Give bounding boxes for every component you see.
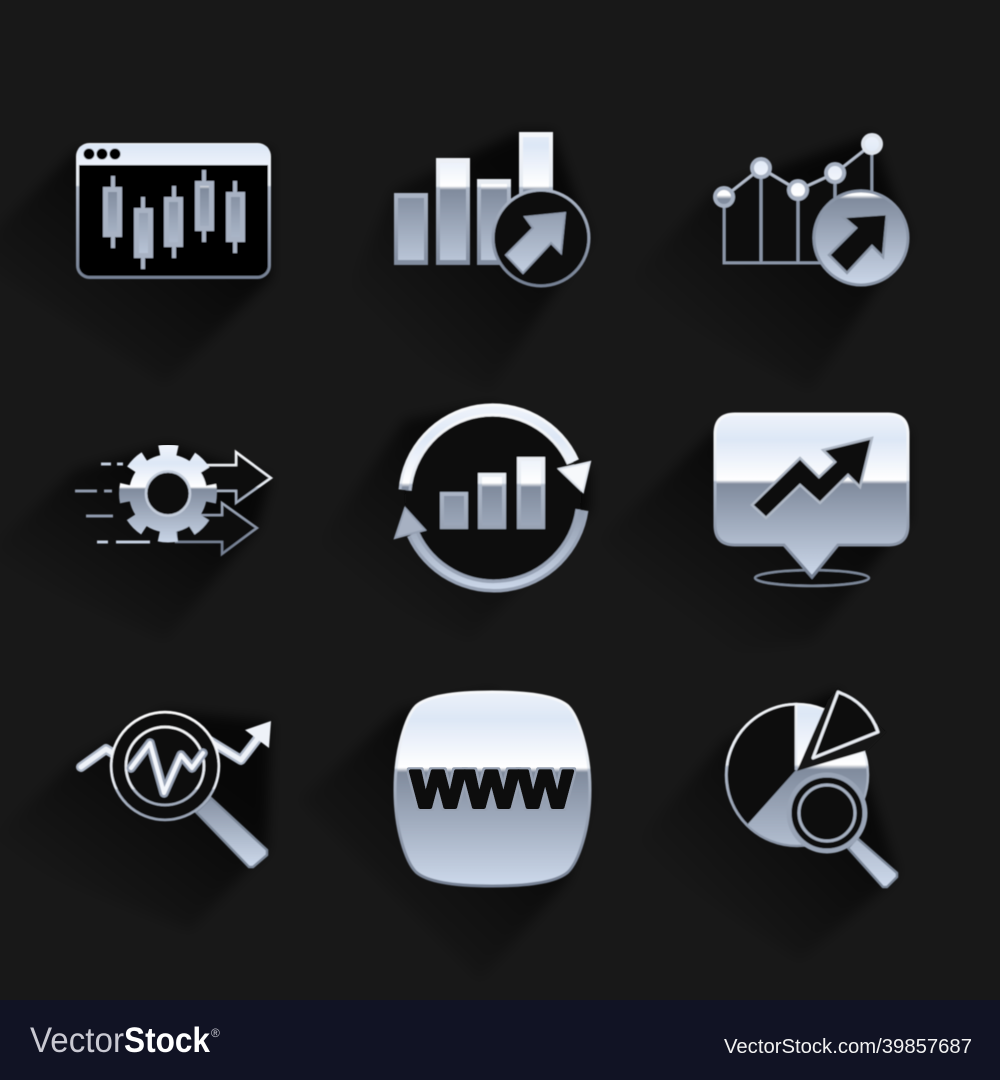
icon: magnifier over trend line [0,711,271,930]
icon: gear with speed arrows [0,445,271,640]
icon: pie chart with magnifier [630,688,897,960]
icon: map pin with rising arrow [600,414,909,660]
pin base ellipse [755,570,869,586]
www label: www [410,746,573,822]
logo: VectorStock [30,1021,220,1060]
image id: VectorStock.com/39857687 [724,1036,972,1058]
logo: VectorStock: Stock [124,1021,210,1060]
icon: line chart with up arrow badge [620,134,909,390]
icon: browser window with candlestick chart [0,144,271,384]
icon: circular arrows around bar chart [300,405,590,640]
icon: www squircle [300,692,590,980]
logo: VectorStock: ® [211,1026,220,1040]
detached slice [813,692,878,758]
rising arrow [752,438,872,518]
icon: bar chart with up arrow badge [330,132,590,390]
speech bubble [715,414,908,577]
logo: VectorStock: Vector [30,1021,124,1060]
footer band [0,1000,1000,1080]
